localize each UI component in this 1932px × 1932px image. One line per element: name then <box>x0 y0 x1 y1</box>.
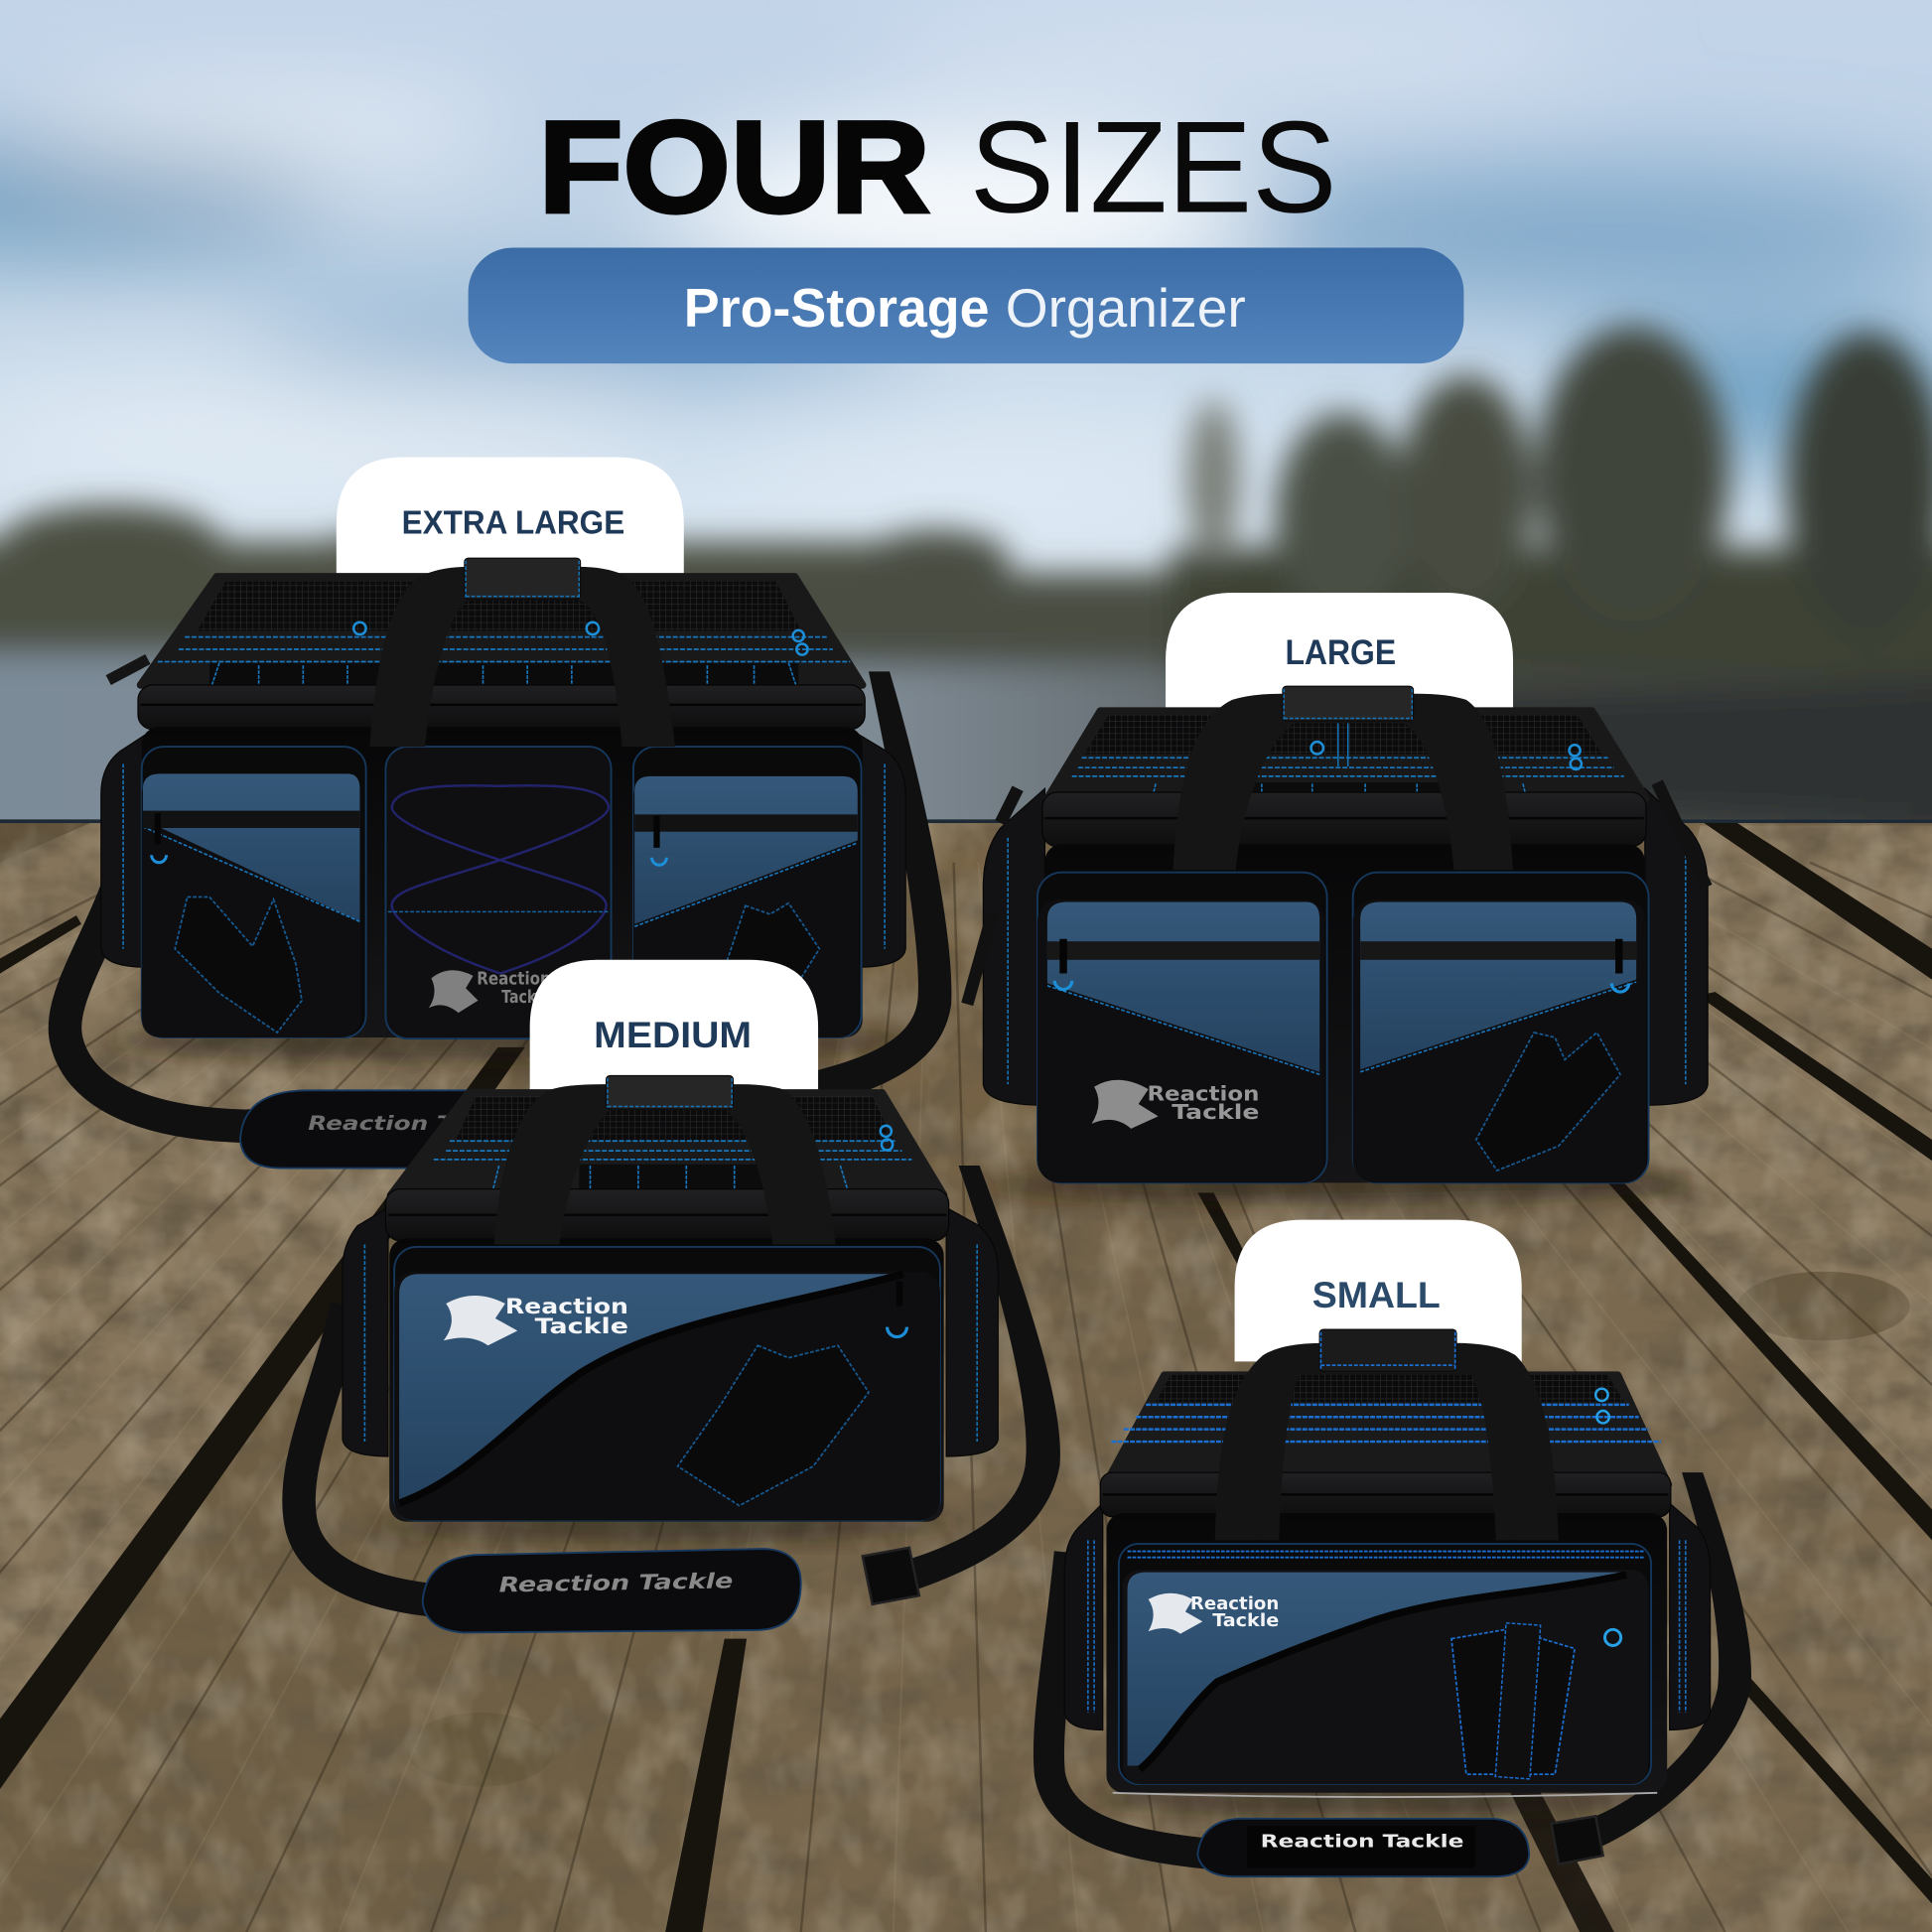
label: large <box>1166 593 1513 721</box>
logo: white: Reaction <box>1190 1594 1279 1614</box>
lid and body <box>1042 792 1646 847</box>
logo: white: Reaction <box>505 1295 628 1319</box>
logo: gray: Reaction <box>1147 1081 1259 1105</box>
handles <box>1215 1343 1559 1540</box>
subtitle pill <box>469 247 1463 363</box>
pocket: center with bungee: Reaction <box>477 970 551 990</box>
strap pad <box>240 1090 530 1169</box>
pocket: right <box>1353 873 1649 1182</box>
logo: gray <box>1092 1080 1259 1129</box>
handles <box>369 567 675 747</box>
label: small: SMALL <box>1312 1274 1441 1315</box>
subtitle pill: Organizer <box>1006 278 1246 339</box>
shoulder strap <box>65 863 369 1126</box>
label: extra large <box>337 457 684 586</box>
lid and body <box>138 685 865 730</box>
title: SIZES <box>970 93 1337 239</box>
handles <box>1173 694 1513 870</box>
top with mesh <box>140 577 863 685</box>
pocket: right <box>633 747 862 1037</box>
top <box>1105 1375 1668 1484</box>
top <box>390 1093 944 1195</box>
pocket: left <box>1037 873 1327 1182</box>
shoulder strap <box>299 1307 450 1601</box>
buckle <box>1552 1816 1603 1864</box>
label: large: LARGE <box>1285 634 1396 672</box>
logo: gray: Tackle <box>1172 1100 1259 1124</box>
title <box>538 93 1337 239</box>
pocket <box>1119 1544 1651 1784</box>
lid and body <box>1100 1472 1671 1517</box>
label: small <box>1235 1220 1522 1361</box>
side panels <box>983 788 1708 1105</box>
pocket: left <box>142 747 366 1037</box>
shoulder strap <box>1048 1553 1213 1855</box>
label: medium: MEDIUM <box>594 1014 752 1055</box>
lid and body <box>385 1189 949 1241</box>
side panels <box>343 1207 998 1456</box>
wooden dock <box>0 818 1932 1932</box>
logo: white <box>1149 1593 1279 1634</box>
side panels <box>101 733 905 967</box>
subtitle pill: Pro-Storage <box>684 278 990 339</box>
pocket <box>394 1247 940 1520</box>
bag: small <box>1048 1329 1751 1876</box>
title: FOUR <box>538 93 930 239</box>
top <box>1047 711 1646 798</box>
strap pad: Reaction Tackle <box>1261 1832 1463 1852</box>
bag: large <box>967 686 1708 1202</box>
bag: extra large <box>65 558 951 1169</box>
handles <box>494 1084 835 1244</box>
logo: white: Tackle <box>535 1314 628 1339</box>
side panels <box>1064 1503 1711 1729</box>
pocket: center with bungee <box>385 747 612 1038</box>
bag: medium <box>299 1075 1060 1632</box>
buckle <box>863 1548 919 1604</box>
strap pad: Reaction T <box>308 1112 456 1135</box>
label: medium <box>530 960 818 1097</box>
strap pad: Reaction Tackle <box>498 1568 733 1596</box>
strap pad <box>1197 1819 1529 1876</box>
label: extra large: EXTRA LARGE <box>402 504 624 541</box>
logo: white: Tackle <box>1212 1611 1279 1631</box>
logo fish <box>429 970 479 1013</box>
background: blurred lake and sky <box>0 0 1932 850</box>
logo: white <box>444 1295 628 1345</box>
pocket: center with bungee: Tackle <box>501 988 551 1008</box>
strap pad <box>423 1549 801 1632</box>
